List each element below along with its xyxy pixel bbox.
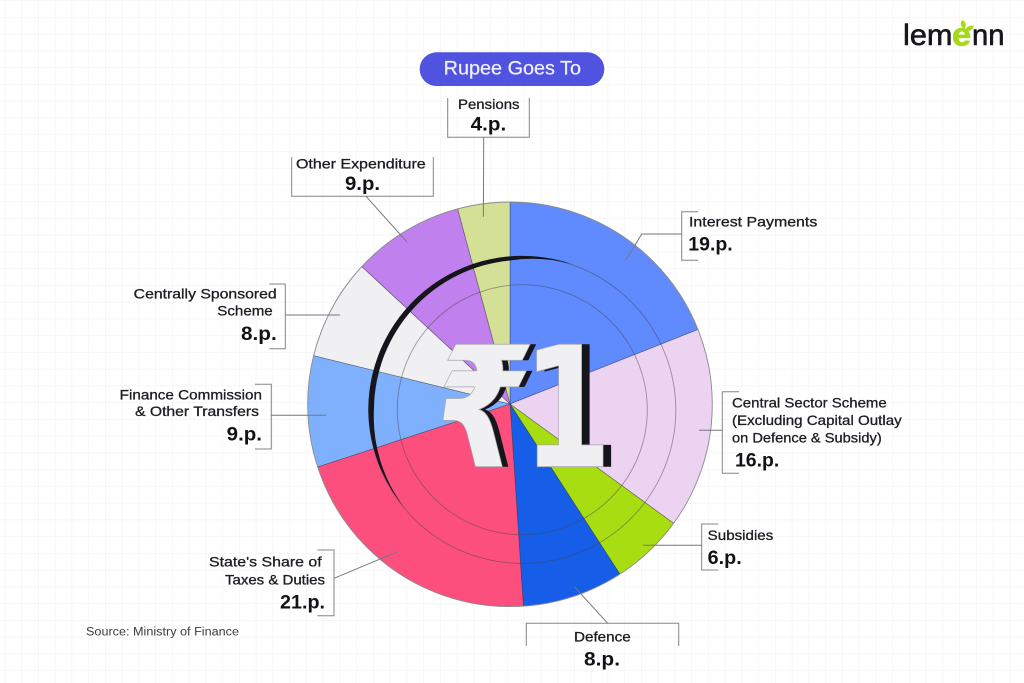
label: State's Share of Taxes and Duties 21.p.: Taxes & Duties (225, 571, 325, 587)
label: Centrally Sponsored Scheme 8.p. (134, 284, 340, 349)
label: Interest Payments 19.p. (626, 212, 817, 260)
rupee symbol: ₹1: 1 (522, 312, 612, 507)
title pill: Rupee Goes To: Rupee Goes To (444, 59, 581, 80)
wedge: Finance Commission and Other Transfers (308, 356, 511, 468)
logo: lemenn: e (952, 16, 971, 52)
label: Finance Commission and Other Transfers 9.p.: & Other Transfers (135, 403, 259, 419)
label: State's Share of Taxes and Duties 21.p.: State's Share of (209, 554, 322, 570)
label: State's Share of Taxes and Duties 21.p. (209, 550, 398, 616)
label: Other Expenditure 9.p.: 9.p. (345, 174, 380, 195)
rupee symbol: ₹1: ₹ (426, 312, 547, 507)
label: Finance Commission and Other Transfers 9.p. (120, 384, 326, 449)
label: Finance Commission and Other Transfers 9.p.: Finance Commission (120, 386, 262, 402)
source note: Source: Ministry of Finance (86, 626, 239, 638)
wedge: State's Share of Taxes and Duties (318, 404, 524, 606)
label: Pensions 4.p.: 4.p. (471, 115, 506, 136)
wedge: Defence (510, 404, 620, 606)
label: Central Sector Scheme 16.p.: Central Sector Scheme (732, 394, 887, 410)
label: Centrally Sponsored Scheme 8.p.: Scheme (217, 303, 273, 319)
label: Defence 8.p. (526, 587, 679, 671)
label: Defence 8.p.: 8.p. (584, 650, 620, 671)
logo: lemenn: lem (903, 19, 952, 52)
rupee symbol: ₹1: 1 (530, 312, 620, 507)
rupee symbol: ₹1 (420, 312, 620, 507)
rupee symbol: ₹1: ₹ (420, 312, 541, 507)
wedge: Central Sector Scheme (510, 329, 712, 523)
label: Defence 8.p.: Defence (574, 629, 631, 645)
label: Central Sector Scheme 16.p.: on Defence & Subsidy) (732, 430, 882, 446)
label: Central Sector Scheme 16.p.: (Excluding Capital Outlay (732, 412, 902, 428)
pie chart: rupee expenditure (307, 202, 713, 607)
wedge: Interest Payments (510, 202, 698, 404)
logo: lemenn (903, 16, 1004, 52)
label: Pensions 4.p.: Pensions (458, 96, 520, 112)
label: State's Share of Taxes and Duties 21.p.: 21.p. (280, 592, 325, 613)
label: Finance Commission and Other Transfers 9.p.: 9.p. (227, 425, 262, 446)
label: Subsidies 6.p. (643, 524, 773, 570)
wedge: Other Expenditure (362, 210, 510, 405)
label: Central Sector Scheme 16.p. (699, 392, 902, 473)
label: Subsidies 6.p.: 6.p. (708, 548, 742, 569)
logo: lemenn: nn (972, 19, 1004, 52)
label: Centrally Sponsored Scheme 8.p.: 8.p. (241, 324, 277, 345)
label: Subsidies 6.p.: Subsidies (708, 527, 773, 543)
wedge: Subsidies (510, 404, 674, 574)
wedge: Pensions (458, 202, 510, 404)
label: Centrally Sponsored Scheme 8.p.: Centrally Sponsored (134, 286, 277, 302)
title pill: Rupee Goes To (420, 52, 604, 86)
wedge: Centrally Sponsored Scheme (314, 267, 511, 404)
label: Other Expenditure 9.p.: Other Expenditure (296, 155, 426, 171)
label: Interest Payments 19.p.: Interest Payments (689, 214, 817, 230)
black crescent arc (368, 256, 572, 508)
label: Central Sector Scheme 16.p.: 16.p. (735, 451, 779, 472)
label: Other Expenditure 9.p. (292, 155, 433, 242)
label: Interest Payments 19.p.: 19.p. (688, 235, 733, 256)
label: Pensions 4.p. (448, 96, 529, 217)
